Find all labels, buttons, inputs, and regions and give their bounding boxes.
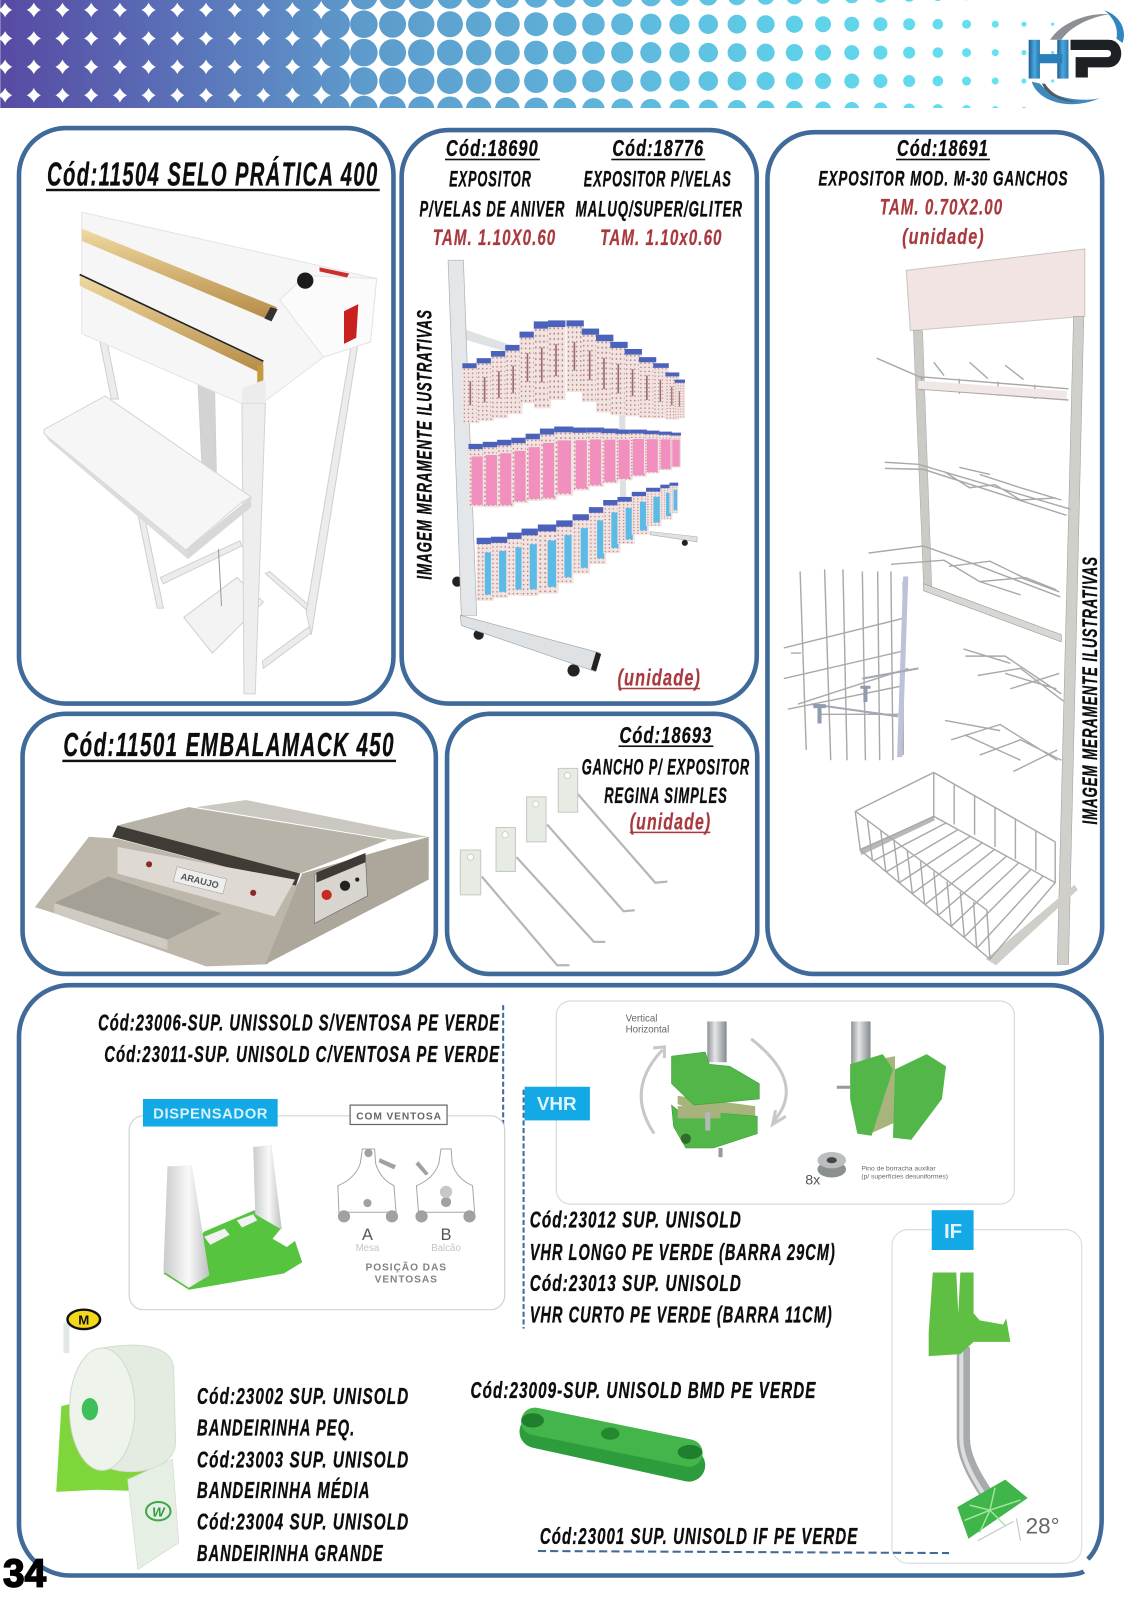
label: com ventosa: COM VENTOSA	[356, 1111, 442, 1122]
text: unidade: (unidade)	[617, 665, 701, 691]
text: códigos 23006 e 23011: Cód:23006-SUP. UNISSOLD S/VENTOSA PE VERDE	[98, 1010, 500, 1036]
text: código 23001 com linha tracejada: Cód:23001 SUP. UNISOLD IF PE VERDE	[540, 1523, 858, 1549]
icon: rolo com suporte bandeirinha	[56, 1310, 179, 1569]
text: código 23009: Cód:23009-SUP. UNISOLD BMD PE VERDE	[471, 1377, 816, 1403]
text: gancho para expositor	[582, 722, 750, 835]
heading: Cód 11501: Cód:11501 EMBALAMACK 450	[63, 727, 395, 764]
text: código 18691: TAM. 0.70X2.00	[880, 194, 1003, 219]
text: código 18690: TAM. 1.10X0.60	[433, 225, 556, 250]
text: código 18690: EXPOSITOR	[449, 167, 532, 192]
text: códigos 23012 e 23013: Cód:23012 SUP. UNISOLD	[530, 1207, 742, 1233]
text: código 18776	[576, 135, 743, 250]
text: pino de borracha: (p/ superfícies desuniformes)	[861, 1174, 948, 1181]
panel: embalamack 450	[23, 714, 436, 974]
text: código 18690: P/VELAS DE ANIVER	[420, 196, 565, 221]
text: gancho para expositor: Cód:18693	[620, 722, 712, 748]
icon: rolo com suporte bandeirinha: W	[152, 1504, 166, 1519]
badge: dispensador	[143, 1099, 278, 1127]
page number: 34	[3, 1553, 46, 1596]
text: código 18776: MALUQ/SUPER/GLITER	[576, 196, 743, 221]
text: códigos 23012 e 23013: VHR LONGO PE VERDE (BARRA 29CM)	[530, 1239, 836, 1265]
icon: barra BMD verde	[522, 1413, 702, 1465]
text: códigos 23002 23003 23004: BANDEIRINHA GRANDE	[197, 1540, 384, 1566]
panel: expositor para velas	[402, 130, 757, 704]
text: códigos 23002 23003 23004: BANDEIRINHA MÉDIA	[197, 1476, 371, 1503]
label: com ventosa	[350, 1105, 447, 1124]
icon: pino de borracha	[805, 1152, 846, 1189]
photo: seladora embalamack: ARAUJO	[180, 871, 220, 890]
text: código 18776: EXPOSITOR P/VELAS	[584, 167, 732, 192]
badge: VHR	[525, 1087, 590, 1120]
panel: suportes unisold	[19, 985, 1102, 1576]
vertical note: IMAGEM MERAMENTE ILUSTRATIVAS	[413, 309, 437, 580]
badge: IF: IF	[944, 1221, 962, 1243]
icon: pino de borracha: 8x	[805, 1173, 820, 1189]
panel: gancho 18693	[447, 714, 757, 974]
text: gancho para expositor: REGINA SIMPLES	[604, 783, 728, 808]
text: código 18690	[420, 135, 565, 250]
panel: selo prática 400	[19, 128, 393, 704]
photo: expositor aramado	[784, 249, 1085, 965]
text: A Mesa B Balcão posição das ventosas	[356, 1226, 461, 1286]
text: gancho para expositor: (unidade)	[630, 809, 711, 835]
icon: suporte IF com haste e base: 28°	[1026, 1514, 1060, 1539]
icon: suporte VHR lateral	[837, 1021, 946, 1140]
text: unidade	[617, 665, 701, 691]
badge: tamanho M: M	[78, 1312, 89, 1327]
icon: suporte dispensador verde	[163, 1145, 302, 1290]
text: A Mesa B Balcão posição das ventosas: POSIÇÃO DAS	[366, 1260, 447, 1273]
logo: HP	[1029, 10, 1124, 104]
dispensador panel	[129, 1099, 505, 1310]
photo: seladora embalamack	[35, 800, 429, 966]
heading: Cód 11504: Cód:11504 SELO PRÁTICA 400	[47, 156, 379, 194]
badge: IF	[932, 1210, 974, 1250]
panel: expositor 18691	[767, 132, 1102, 974]
badge: VHR: VHR	[537, 1093, 577, 1114]
text: código 18691: (unidade)	[902, 224, 985, 249]
icon: suporte IF com haste e base	[929, 1272, 1060, 1541]
text: códigos 23002 23003 23004: Cód:23004 SUP. UNISOLD	[197, 1509, 409, 1535]
photo: seladora de pedal	[44, 212, 377, 694]
text: códigos 23006 e 23011: Cód:23011-SUP. UNISOLD C/VENTOSA PE VERDE	[104, 1041, 500, 1067]
text: A Mesa B Balcão posição das ventosas: B	[441, 1226, 452, 1244]
text: A Mesa B Balcão posição das ventosas: VENTOSAS	[375, 1275, 438, 1286]
text: gancho para expositor: GANCHO P/ EXPOSITOR	[582, 754, 750, 779]
text: códigos 23012 e 23013: Cód:23013 SUP. UNISOLD	[530, 1270, 742, 1296]
text: códigos 23002 23003 23004: BANDEIRINHA PEQ.	[197, 1415, 355, 1441]
icon: suporte VHR frontal	[672, 1021, 759, 1157]
text: código 18691	[818, 135, 1068, 249]
text: código 18690: Cód:18690	[446, 135, 539, 161]
text: códigos 23006 e 23011	[98, 1010, 500, 1067]
text: códigos 23012 e 23013: VHR CURTO PE VERDE (BARRA 11CM)	[530, 1301, 833, 1327]
text: pino de borracha: Pino de borracha auxiliar	[861, 1165, 936, 1172]
text: código 18691: Cód:18691	[897, 135, 989, 161]
text: pino de borracha	[861, 1165, 948, 1181]
badge: dispensador: DISPENSADOR	[153, 1106, 268, 1122]
text: vertical horizontal: Vertical	[626, 1013, 657, 1024]
text: códigos 23002 23003 23004: Cód:23002 SUP. UNISOLD	[197, 1383, 409, 1409]
photo: expositor com velas	[448, 260, 697, 677]
text: códigos 23012 e 23013	[530, 1207, 836, 1327]
vertical note: IMAGEM MERAMENTE ILUSTRATIVAS	[1078, 556, 1102, 824]
header band with halftone dots	[0, 0, 1139, 108]
text: código 18776: Cód:18776	[612, 135, 704, 161]
text: A Mesa B Balcão posição das ventosas: A	[362, 1226, 373, 1244]
text: A Mesa B Balcão posição das ventosas: Balcão	[431, 1243, 461, 1254]
if panel	[892, 1210, 1082, 1563]
text: vertical horizontal	[626, 1013, 669, 1036]
text: códigos 23002 23003 23004	[197, 1383, 409, 1566]
text: código 18776: TAM. 1.10x0.60	[600, 225, 723, 250]
text: vertical horizontal: Horizontal	[626, 1025, 669, 1036]
icon: posição das ventosas	[338, 1149, 476, 1222]
text: A Mesa B Balcão posição das ventosas: Mesa	[356, 1243, 380, 1254]
text: códigos 23002 23003 23004: Cód:23003 SUP. UNISOLD	[197, 1446, 409, 1472]
photo: ganchos	[460, 768, 667, 965]
vhr panel	[525, 1001, 1014, 1204]
badge: tamanho M	[67, 1310, 100, 1329]
icon: arrows de rotação	[641, 1039, 786, 1134]
